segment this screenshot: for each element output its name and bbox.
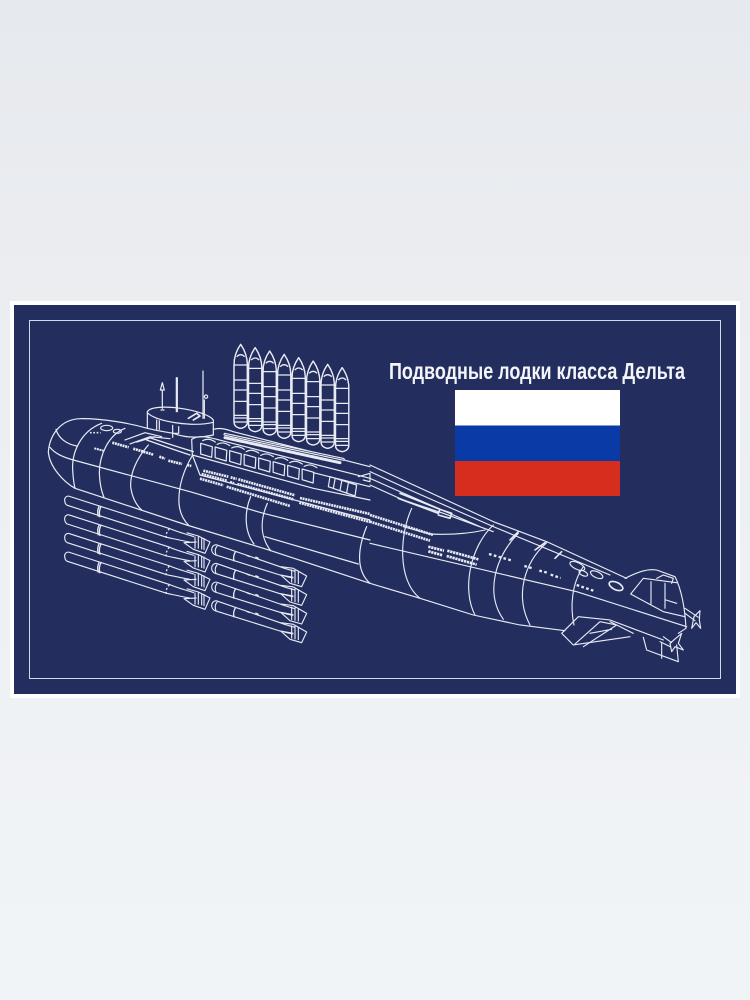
hull outline	[48, 419, 370, 583]
aft windows and hatches	[370, 515, 624, 592]
submarine blueprint: aft section	[370, 465, 701, 662]
sail and masts	[147, 371, 213, 437]
torpedoes: large row	[65, 496, 210, 609]
lower stabilizer	[562, 617, 678, 662]
inner frame	[30, 320, 720, 678]
Russian flag	[455, 390, 620, 496]
hull windows	[90, 433, 370, 522]
navy panel	[14, 305, 736, 694]
aft hull	[370, 465, 687, 631]
missile deck casing	[192, 429, 370, 520]
missiles	[234, 344, 349, 452]
submarine blueprint: forward section	[48, 371, 370, 583]
torpedoes: small row	[212, 545, 307, 643]
missile hatches	[201, 439, 317, 483]
stern fin and propellers	[625, 570, 701, 652]
white poster border	[10, 301, 740, 698]
